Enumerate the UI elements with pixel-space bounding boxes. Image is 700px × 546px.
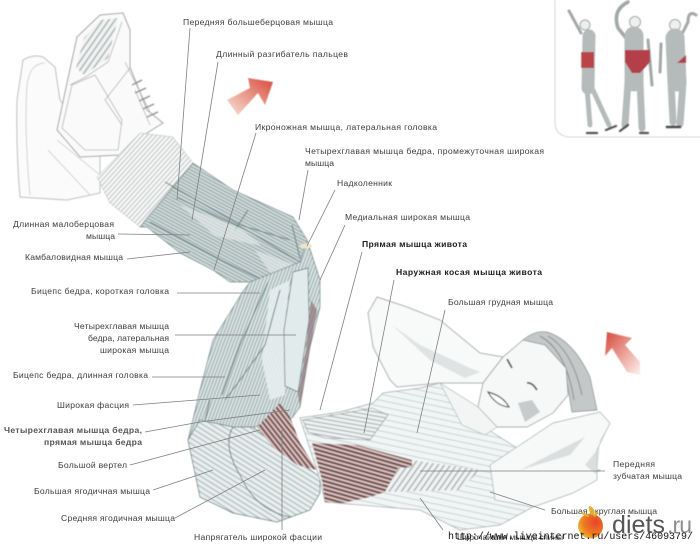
glute fold <box>229 427 290 517</box>
back shoe <box>17 56 100 200</box>
labels: left: Большая ягодичная мышца <box>34 486 150 496</box>
labels: left: Камбаловидная мышца <box>25 252 123 262</box>
watermark: diets.ru logo <box>578 506 692 539</box>
labels: top and right: Передняя большеберцовая мышца <box>183 17 333 27</box>
figure: back view <box>660 14 696 127</box>
labels: left <box>4 219 175 523</box>
arm behind head <box>368 297 503 387</box>
labels: top and right: Широчайшая мышца спины <box>457 532 563 542</box>
labels: left: Бицепс бедра, длинная головка <box>13 370 148 380</box>
labels: left: Бицепс бедра, короткая головка <box>31 286 169 296</box>
labels: left: широкая мышца <box>100 345 169 355</box>
labels: top and right: Прямая мышца живота <box>362 239 467 249</box>
rectus abdominis, red <box>257 403 317 470</box>
knee cap <box>300 244 312 248</box>
watermark: diets.ru logo: diets <box>612 511 665 539</box>
glute <box>188 420 320 522</box>
labels: top and right: Медиальная широкая мышца <box>345 212 470 222</box>
thigh light panel <box>262 280 290 400</box>
labels: top and right: Надколенник <box>337 178 392 188</box>
vastus medialis <box>284 268 309 392</box>
forearm shading <box>392 325 480 378</box>
figure: side view <box>569 11 616 133</box>
right arm <box>490 412 610 507</box>
labels: top and right: Четырехглавая мышца бедра, промежуточная широкая <box>305 146 544 156</box>
hair <box>523 332 597 412</box>
serratus <box>385 460 480 492</box>
labels: left: прямая мышца бедра <box>44 437 142 447</box>
shoe tread strip and upper <box>62 22 150 150</box>
lower leg highlights <box>180 205 295 280</box>
icon: leaf <box>580 506 598 517</box>
labels: top and right: Длинный разгибатель пальцев <box>216 49 348 59</box>
labels: top and right <box>183 17 682 542</box>
labels: left: бедра, латеральная <box>88 333 169 343</box>
thigh <box>188 240 320 450</box>
lower leg muscle contours <box>150 182 300 278</box>
lower leg <box>140 163 320 282</box>
sock <box>97 133 193 227</box>
face <box>478 340 568 427</box>
external oblique, red <box>312 443 412 503</box>
labels: left: Средняя ягодичная мышца <box>61 513 175 523</box>
thigh contours <box>200 282 280 440</box>
front shoe <box>57 13 163 157</box>
mouth <box>488 392 509 407</box>
neck <box>440 383 497 435</box>
upper abs strip <box>303 408 388 440</box>
cheek shading <box>518 400 540 422</box>
torso <box>300 383 600 530</box>
labels: top and right: Напрягатель широкой фасции <box>194 532 322 542</box>
back shoe details <box>26 63 100 195</box>
labels: left: Четырехглавая мышца бедра, <box>4 425 142 435</box>
shoe sole tread <box>76 18 118 75</box>
labels: left: Большой вертел <box>58 460 127 470</box>
labels: left: Длинная малоберцовая <box>13 219 114 229</box>
labels: left: Четырехглавая мышца <box>74 321 169 331</box>
hamstring reddish edge <box>298 300 317 407</box>
elbow shading <box>520 423 610 475</box>
eyes <box>507 359 537 390</box>
inset panel: muscle location figures <box>555 0 700 137</box>
leader lines <box>118 28 605 530</box>
watermark: URL: http://www.liveinternet.ru/users/4609379/ <box>448 531 693 543</box>
arrow: upper <box>227 78 273 115</box>
figure: front view <box>616 2 652 133</box>
labels: left: мышца <box>86 231 115 241</box>
labels: top and right: Наружная косая мышца живота <box>396 267 542 277</box>
labels: top and right: Большая округлая мышца <box>551 506 657 516</box>
laces <box>132 80 158 117</box>
arrow: right <box>605 332 640 375</box>
icon: apple <box>578 514 603 538</box>
labels: top and right: Передняя <box>613 459 655 469</box>
labels: top and right: Икроножная мышца, латеральная головка <box>255 122 437 132</box>
labels: top and right: зубчатая мышца <box>613 471 682 481</box>
labels: top and right: мышца <box>305 158 334 168</box>
labels: top and right: Большая грудная мышца <box>448 297 553 307</box>
labels: left: Широкая фасция <box>57 400 129 410</box>
hair strands <box>540 336 582 400</box>
watermark: diets.ru logo: .ru <box>667 512 692 538</box>
